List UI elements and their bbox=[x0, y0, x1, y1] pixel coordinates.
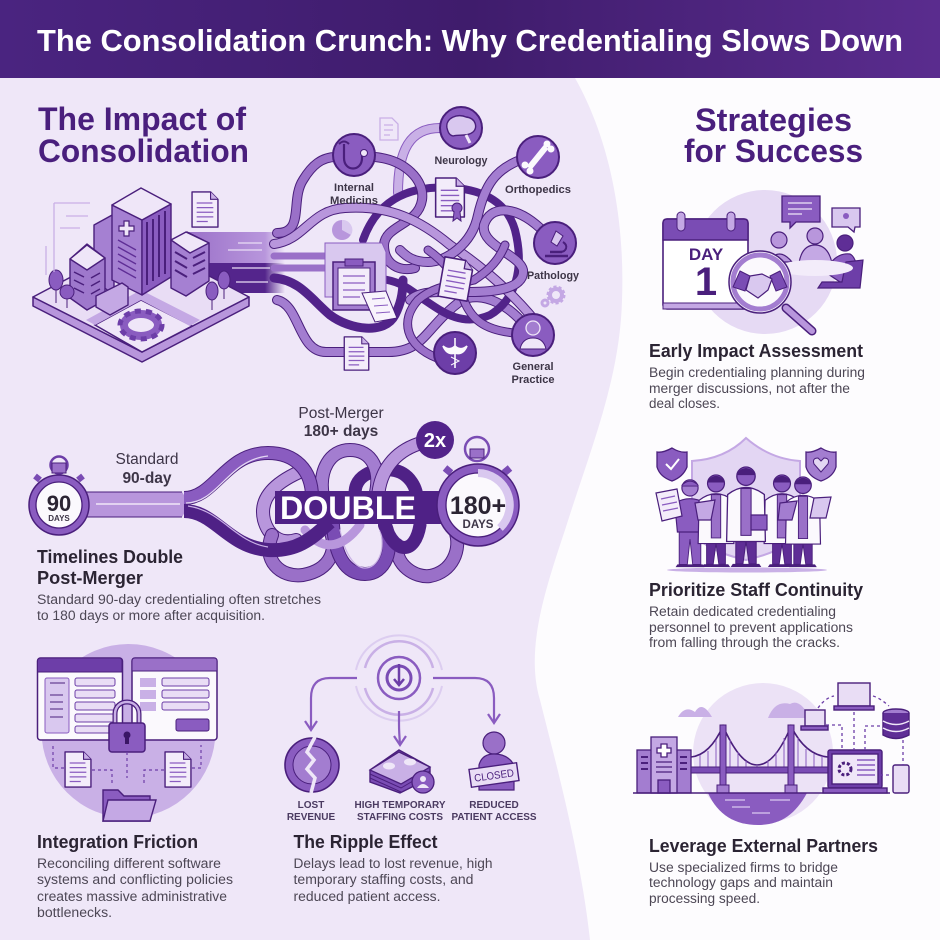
calendar bbox=[663, 212, 748, 309]
node: orthopedics bbox=[517, 136, 559, 178]
text: early impact assessment bbox=[649, 341, 865, 411]
dark pathway lower bbox=[274, 278, 403, 328]
label: post-merger 180+ days bbox=[298, 405, 384, 440]
left window bbox=[38, 658, 122, 740]
text: the ripple effect bbox=[294, 832, 492, 904]
header banner bbox=[0, 0, 940, 78]
diagram: ripple effect bbox=[285, 635, 537, 823]
data ribbon bbox=[185, 232, 285, 293]
specialty labels: Neurology bbox=[434, 155, 488, 167]
icon: lost revenue bbox=[285, 737, 339, 793]
label: post-merger 180+ days: Post-Merger bbox=[298, 405, 384, 422]
heading: the impact of consolidation: Consolidation bbox=[38, 133, 249, 169]
specialty labels: Orthopedics bbox=[505, 184, 571, 196]
badge: 2x bbox=[416, 421, 454, 459]
specialty labels bbox=[330, 155, 580, 386]
impact labels: REDUCED bbox=[469, 800, 519, 811]
node: pathology bbox=[534, 222, 576, 264]
water bbox=[708, 793, 807, 825]
text: integration friction: systems and conflicting policies bbox=[37, 872, 233, 887]
node: internal medicine bbox=[333, 134, 375, 176]
text: timelines double post-merger bbox=[37, 547, 321, 623]
standard timeline tube bbox=[85, 492, 190, 517]
calendar: 1 bbox=[695, 260, 717, 304]
text: leverage external partners bbox=[649, 836, 878, 906]
text: early impact assessment: deal closes. bbox=[649, 396, 720, 411]
magnifying glass with handshake bbox=[729, 251, 812, 331]
impact labels: PATIENT ACCESS bbox=[452, 812, 537, 823]
text: prioritize staff continuity: Prioritize Staff Continuity bbox=[649, 580, 863, 600]
banner: double: DOUBLE bbox=[280, 490, 416, 526]
icon: lower document bbox=[344, 337, 369, 370]
specialty labels: Pathology bbox=[527, 270, 580, 282]
icon: closed sign bbox=[469, 732, 519, 790]
text: prioritize staff continuity: from falling through the cracks. bbox=[649, 635, 840, 650]
text: leverage external partners: processing speed. bbox=[649, 891, 760, 906]
text: timelines double post-merger: to 180 days or more after acquisition. bbox=[37, 608, 265, 623]
impact labels: STAFFING COSTS bbox=[357, 812, 443, 823]
label: standard 90-day bbox=[116, 451, 178, 487]
right window bbox=[132, 658, 217, 740]
text: prioritize staff continuity bbox=[649, 580, 863, 650]
specialty labels: Practice bbox=[512, 374, 554, 386]
stopwatch: 180+ days: 180+ bbox=[450, 492, 506, 520]
stopwatch: 90 days: DAYS bbox=[48, 514, 70, 523]
text: leverage external partners: Leverage External Partners bbox=[649, 836, 878, 856]
chart: tangled specialty pathways bbox=[274, 128, 540, 358]
calendar: DAY bbox=[689, 245, 724, 264]
gear bbox=[120, 311, 162, 339]
icon: pie chart bbox=[332, 220, 352, 240]
text: integration friction: Reconciling different software bbox=[37, 856, 221, 871]
heading: strategies for success: Strategies bbox=[695, 102, 852, 138]
node: neurology bbox=[440, 107, 482, 149]
shield badge: check bbox=[657, 448, 687, 481]
text: integration friction bbox=[37, 832, 233, 920]
icon: document stack bbox=[325, 243, 397, 322]
specialty labels: Medicins bbox=[330, 195, 378, 207]
text: early impact assessment: Early Impact Assessment bbox=[649, 341, 863, 361]
node: general practice bbox=[512, 314, 554, 356]
text: early impact assessment: Begin credentialing planning during bbox=[649, 365, 865, 380]
illustration: integration friction bbox=[38, 644, 217, 821]
stopwatch: 90 days: 90 bbox=[47, 491, 71, 516]
specialty labels: Internal bbox=[334, 182, 374, 194]
icon: faint document bbox=[380, 118, 398, 140]
text: prioritize staff continuity: personnel to prevent applications bbox=[649, 620, 853, 635]
illustration: early impact assessment bbox=[663, 190, 863, 334]
impact labels: LOST bbox=[298, 800, 324, 811]
impact labels bbox=[287, 800, 537, 823]
loops behind banner bbox=[263, 444, 457, 576]
stopwatch: 180+ days: DAYS bbox=[463, 519, 494, 531]
text: timelines double post-merger: Standard 90-day credentialing often stretches bbox=[37, 592, 321, 607]
text: timelines double post-merger: Timelines Double bbox=[37, 547, 183, 567]
clipboards and tablets bbox=[656, 489, 831, 530]
label: post-merger 180+ days: 180+ days bbox=[304, 423, 378, 440]
icon: certificate document bbox=[436, 178, 464, 221]
ripple rings bbox=[356, 635, 442, 721]
shield badge: heart bbox=[806, 448, 836, 481]
icon: closed sign: CLOSED bbox=[473, 767, 515, 785]
text: the ripple effect: The Ripple Effect bbox=[294, 832, 438, 852]
large shield bbox=[692, 438, 800, 560]
clouds bbox=[678, 703, 810, 718]
impact labels: HIGH TEMPORARY bbox=[354, 800, 446, 811]
icon: staffing costs bbox=[370, 750, 434, 793]
icon: loose document bbox=[438, 257, 474, 301]
dark pathway upper bbox=[363, 187, 519, 320]
text: prioritize staff continuity: Retain dedicated credentialing bbox=[649, 604, 836, 619]
meeting people bbox=[768, 228, 863, 288]
impact labels: REVENUE bbox=[287, 812, 335, 823]
title: The Consolidation Crunch: Why Credentialing Slows Down bbox=[37, 23, 903, 58]
chart: timeline tangle bbox=[85, 444, 457, 576]
icon: document near hospital bbox=[192, 192, 218, 227]
stopwatch: 180+ days bbox=[437, 437, 519, 546]
text: the ripple effect: reduced patient access. bbox=[294, 889, 440, 904]
illustration: isometric hospital campus bbox=[33, 188, 285, 362]
heading: strategies for success bbox=[684, 102, 863, 169]
hospital bbox=[637, 737, 691, 793]
heading: strategies for success: for Success bbox=[684, 133, 863, 169]
text: leverage external partners: Use specialized firms to bridge bbox=[649, 860, 838, 875]
trees bbox=[49, 270, 230, 310]
speech bubbles bbox=[782, 196, 860, 232]
text: integration friction: bottlenecks. bbox=[37, 905, 112, 920]
badge: 2x: 2x bbox=[424, 430, 446, 452]
node: caduceus bbox=[434, 332, 476, 374]
label: standard 90-day: 90-day bbox=[122, 470, 172, 487]
text: integration friction: Integration Friction bbox=[37, 832, 198, 852]
illustration: bridge and technology partners bbox=[633, 683, 909, 825]
bridge bbox=[691, 725, 828, 793]
medical cross bbox=[119, 221, 134, 236]
text: leverage external partners: technology gaps and maintain bbox=[649, 875, 833, 890]
heading: the impact of consolidation: The Impact of bbox=[38, 101, 246, 137]
arrows bbox=[305, 678, 500, 745]
text: timelines double post-merger: Post-Merger bbox=[37, 568, 143, 588]
label: standard 90-day: Standard bbox=[116, 451, 178, 468]
heading: the impact of consolidation bbox=[38, 101, 249, 169]
icon: faint gear bbox=[542, 287, 564, 306]
right white panel bbox=[535, 78, 940, 940]
devices bbox=[801, 683, 909, 793]
text: integration friction: creates massive administrative bbox=[37, 889, 227, 904]
text: the ripple effect: temporary staffing costs, and bbox=[294, 872, 474, 887]
folder bbox=[103, 790, 156, 821]
specialty labels: General bbox=[512, 361, 554, 373]
team of five bbox=[675, 467, 820, 567]
stopwatch: 90 days bbox=[29, 456, 89, 535]
illustration: staff continuity bbox=[656, 438, 836, 572]
text: the ripple effect: Delays lead to lost revenue, high bbox=[294, 856, 492, 871]
padlock bbox=[109, 702, 145, 752]
text: early impact assessment: merger discussions, not after the bbox=[649, 381, 850, 396]
